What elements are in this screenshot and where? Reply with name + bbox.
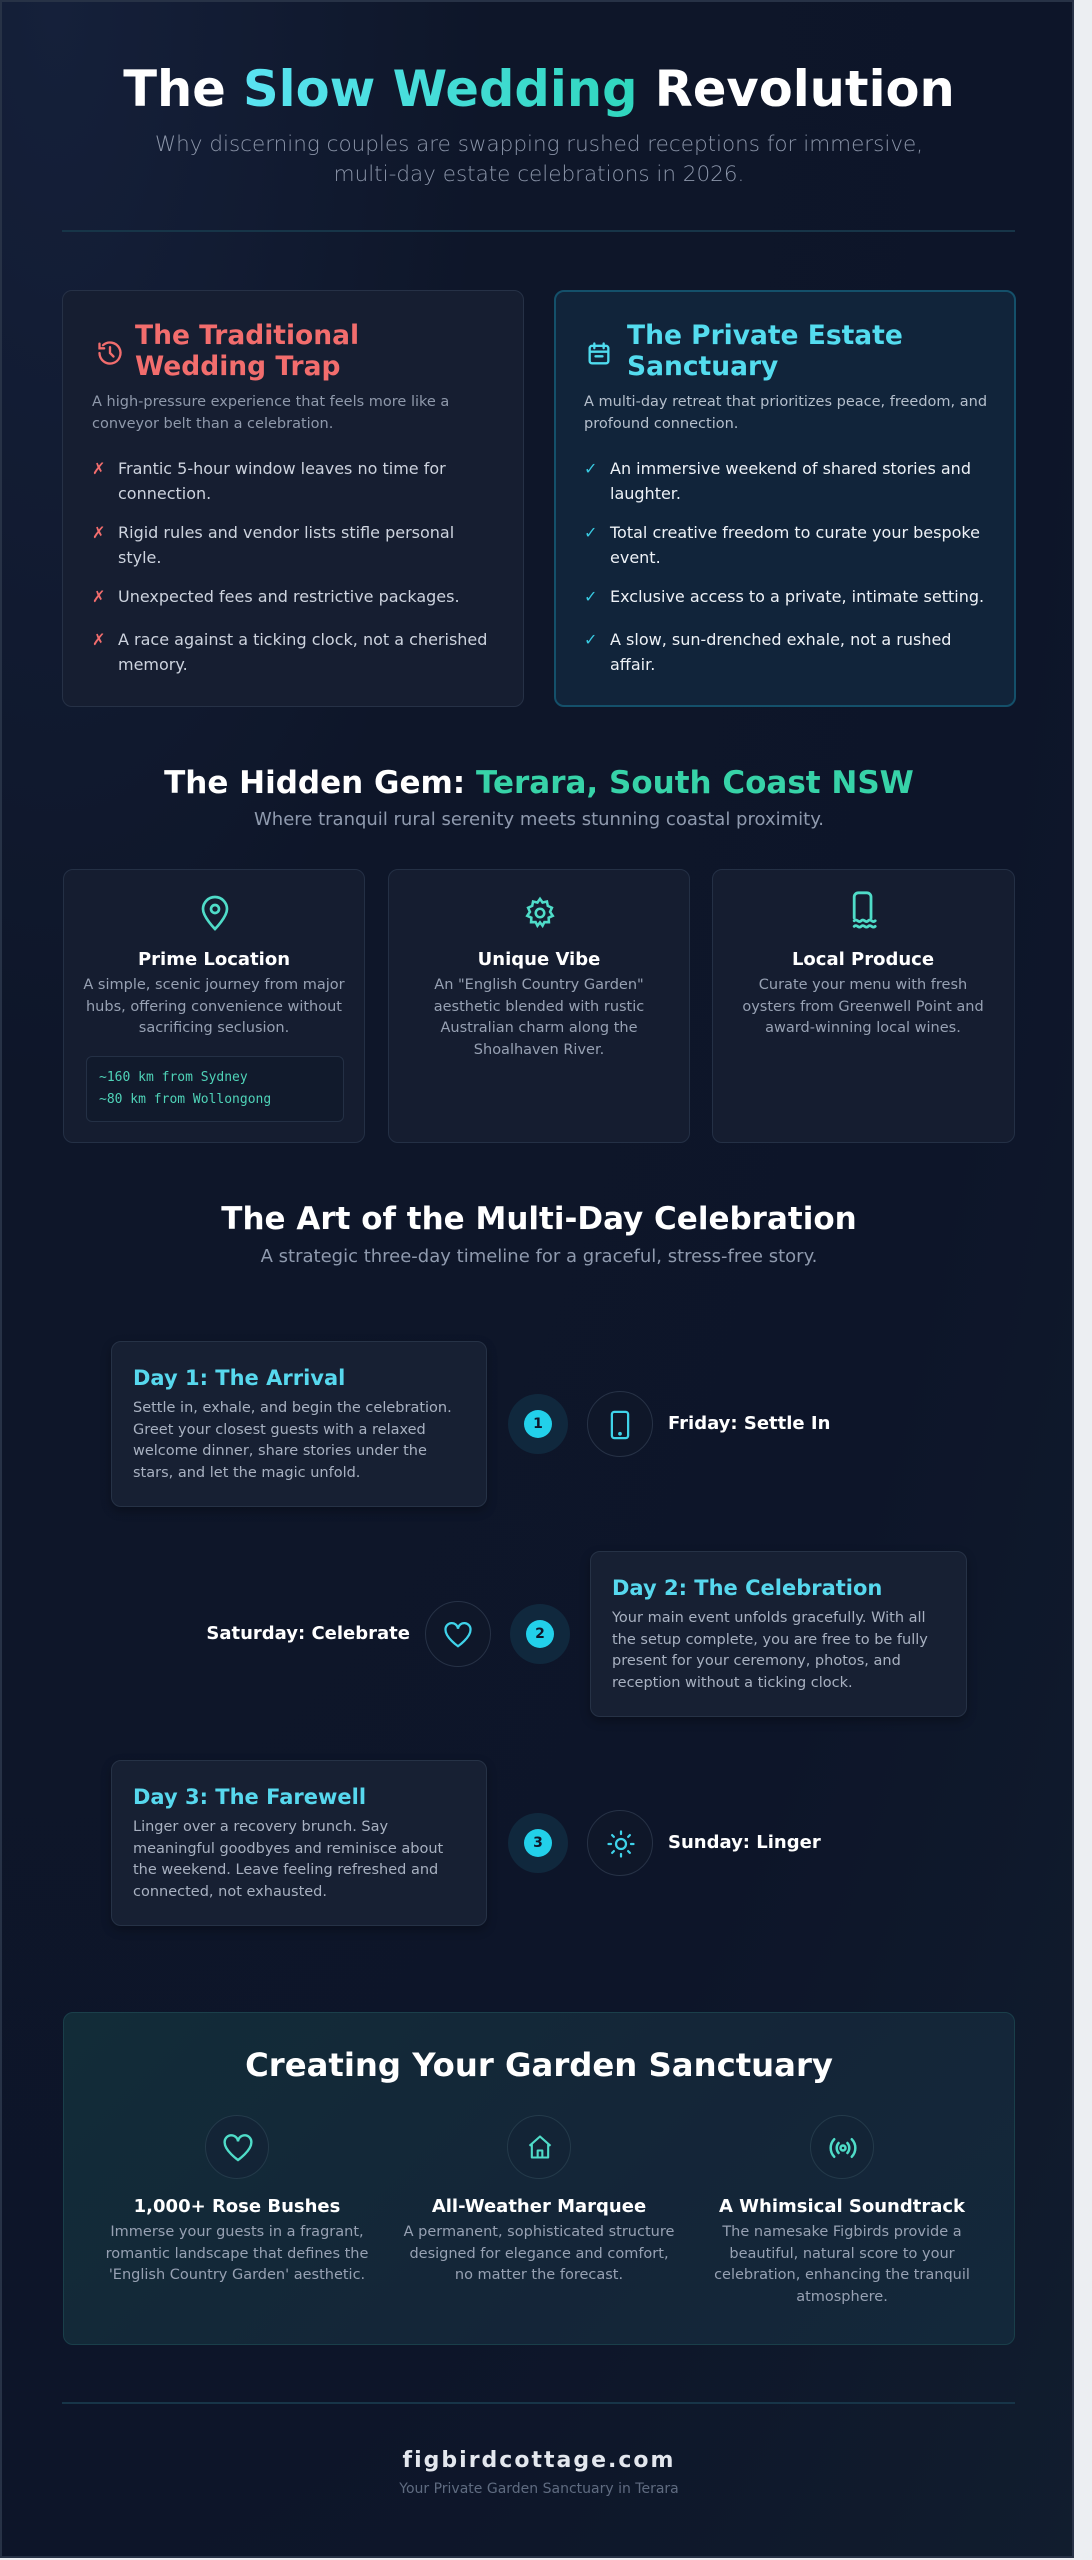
heading: The Private Estate	[627, 320, 903, 351]
panel: private estate sanctuary: ✓	[584, 459, 597, 478]
panel: garden sanctuary	[63, 2012, 1015, 2345]
panel: traditional wedding trap: ✗	[92, 630, 105, 649]
title: Unique Vibe	[478, 949, 600, 970]
icon: heart	[425, 1601, 491, 1667]
label: sunday: Sunday: Linger	[668, 1832, 821, 1853]
description: Curate your menu with fresh oysters from Greenwell Point and award-winning local wines.	[742, 977, 984, 1036]
panel: traditional wedding trap: Frantic 5-hour window leaves no time for connection.	[118, 459, 446, 503]
list: benefits	[584, 459, 984, 674]
feature: marquee	[404, 2115, 674, 2283]
timeline: day 3 card: Linger over a recovery brunch. Say meaningful goodbyes and reminisce about the weekend. Leave feeling refreshed and connected, not exhausted.	[133, 1819, 443, 1900]
panel: private estate sanctuary	[554, 290, 1016, 707]
title: The Slow Wedding Revolution	[123, 60, 955, 118]
panel: private estate sanctuary: Exclusive access to a private, intimate setting.	[610, 587, 984, 606]
timeline: day 2 card: Day 2: The Celebration	[612, 1576, 882, 1600]
label: friday: Friday: Settle In	[668, 1413, 830, 1434]
feature: soundtrack	[714, 2115, 970, 2304]
panel: private estate sanctuary: A slow, sun-drenched exhale, not a rushed affair.	[610, 630, 951, 674]
title: Local Produce	[792, 949, 934, 970]
heading: Wedding Trap	[135, 351, 340, 382]
list: drawbacks	[92, 459, 487, 674]
panel: private estate sanctuary: An immersive weekend of shared stories and laughter.	[610, 459, 971, 503]
subtitle: Why discerning couples are swapping rushed receptions for immersive,	[155, 132, 923, 157]
timeline: day 1 card: Day 1: The Arrival	[133, 1366, 345, 1390]
panel: traditional wedding trap: ✗	[92, 459, 105, 478]
timeline: day 3 card	[111, 1760, 487, 1926]
marker: day 1	[508, 1394, 568, 1454]
timeline: day 3 card: Day 3: The Farewell	[133, 1785, 366, 1809]
feature: marquee: All-Weather Marquee	[432, 2196, 646, 2217]
feature: marquee: A permanent, sophisticated structure designed for elegance and comfort, no matter the forecast.	[404, 2224, 674, 2283]
heading	[135, 320, 359, 382]
label: saturday: Saturday: Celebrate	[206, 1623, 410, 1644]
heading: multi-day: The Art of the Multi-Day Celebration	[221, 1201, 857, 1237]
icon: clock	[98, 341, 122, 365]
panel: traditional wedding trap: ✗	[92, 587, 105, 606]
panel: traditional wedding trap: Rigid rules and vendor lists stifle personal style.	[118, 523, 454, 567]
heading: The Traditional	[135, 320, 359, 351]
distance box: ~80 km from Wollongong	[99, 1092, 271, 1107]
description: An "English Country Garden" aesthetic blended with rustic Australian charm along the Shoalhaven River.	[434, 977, 644, 1058]
icon: phone	[587, 1391, 653, 1457]
panel: traditional wedding trap	[62, 290, 524, 707]
panel: private estate sanctuary: Total creative freedom to curate your bespoke event.	[610, 523, 980, 567]
marker: day 2: 2	[535, 1626, 545, 1642]
heading	[627, 320, 903, 382]
heading: Sanctuary	[627, 351, 778, 382]
subtitle: multi-day: A strategic three-day timeline for a graceful, stress-free story.	[261, 1246, 817, 1267]
subtitle: hidden gem: Where tranquil rural serenity meets stunning coastal proximity.	[254, 809, 824, 830]
icon: map pin	[202, 896, 228, 931]
title: Prime Location	[138, 949, 290, 970]
subtitle	[155, 132, 923, 187]
marker: day 2	[510, 1604, 570, 1664]
panel: unique vibe	[388, 869, 690, 1143]
timeline: day 2 card	[590, 1551, 967, 1717]
subtitle: multi-day estate celebrations in 2026.	[334, 162, 744, 187]
panel: private estate sanctuary: ✓	[584, 523, 597, 542]
icon: produce	[852, 891, 877, 928]
marker: day 3	[508, 1813, 568, 1873]
marker: day 1: 1	[533, 1416, 543, 1432]
heading: hidden gem: The Hidden Gem: Terara, South Coast NSW	[164, 765, 914, 801]
icon: sun	[587, 1810, 653, 1876]
distance box: ~160 km from Sydney	[99, 1070, 248, 1085]
feature: roses: Immerse your guests in a fragrant, romantic landscape that defines the 'English Country Garden' aesthetic.	[106, 2224, 368, 2283]
panel: private estate sanctuary: ✓	[584, 587, 597, 606]
timeline: day 1 card	[111, 1341, 487, 1507]
icon: gear	[525, 896, 555, 928]
heading: Creating Your Garden Sanctuary	[245, 2046, 833, 2084]
marker: day 3: 3	[533, 1835, 543, 1851]
description: A high-pressure experience that feels more like a conveyor belt than a celebration.	[92, 394, 449, 432]
footer: tagline: Your Private Garden Sanctuary in Terara	[399, 2481, 679, 2497]
panel: private estate sanctuary: ✓	[584, 630, 597, 649]
feature: soundtrack: A Whimsical Soundtrack	[719, 2196, 965, 2217]
icon: calendar	[588, 342, 610, 364]
feature: roses: 1,000+ Rose Bushes	[134, 2196, 340, 2217]
panel: traditional wedding trap: Unexpected fees and restrictive packages.	[118, 587, 460, 606]
description: A simple, scenic journey from major hubs, offering convenience without sacrificing seclusion.	[83, 977, 345, 1036]
panel: prime location	[63, 869, 365, 1143]
panel: traditional wedding trap: A race against a ticking clock, not a cherished memory.	[118, 630, 487, 674]
timeline: day 2 card: Your main event unfolds gracefully. With all the setup complete, you are free to be fully present for your ceremony, photos, and reception without a ticking clock.	[612, 1610, 928, 1690]
footer: website: figbirdcottage.com	[403, 2448, 675, 2473]
feature: roses	[106, 2115, 368, 2283]
description: A multi-day retreat that prioritizes peace, freedom, and profound connection.	[584, 394, 987, 432]
timeline: day 1 card: Settle in, exhale, and begin the celebration. Greet your closest guests with a relaxed welcome dinner, share stories under the stars, and let the magic unfold.	[133, 1400, 452, 1480]
panel: local produce	[712, 869, 1015, 1143]
feature: soundtrack: The namesake Figbirds provide a beautiful, natural score to your celebration, enhancing the tranquil atmosphere.	[714, 2224, 970, 2304]
panel: traditional wedding trap: ✗	[92, 523, 105, 542]
distance box	[86, 1056, 344, 1122]
